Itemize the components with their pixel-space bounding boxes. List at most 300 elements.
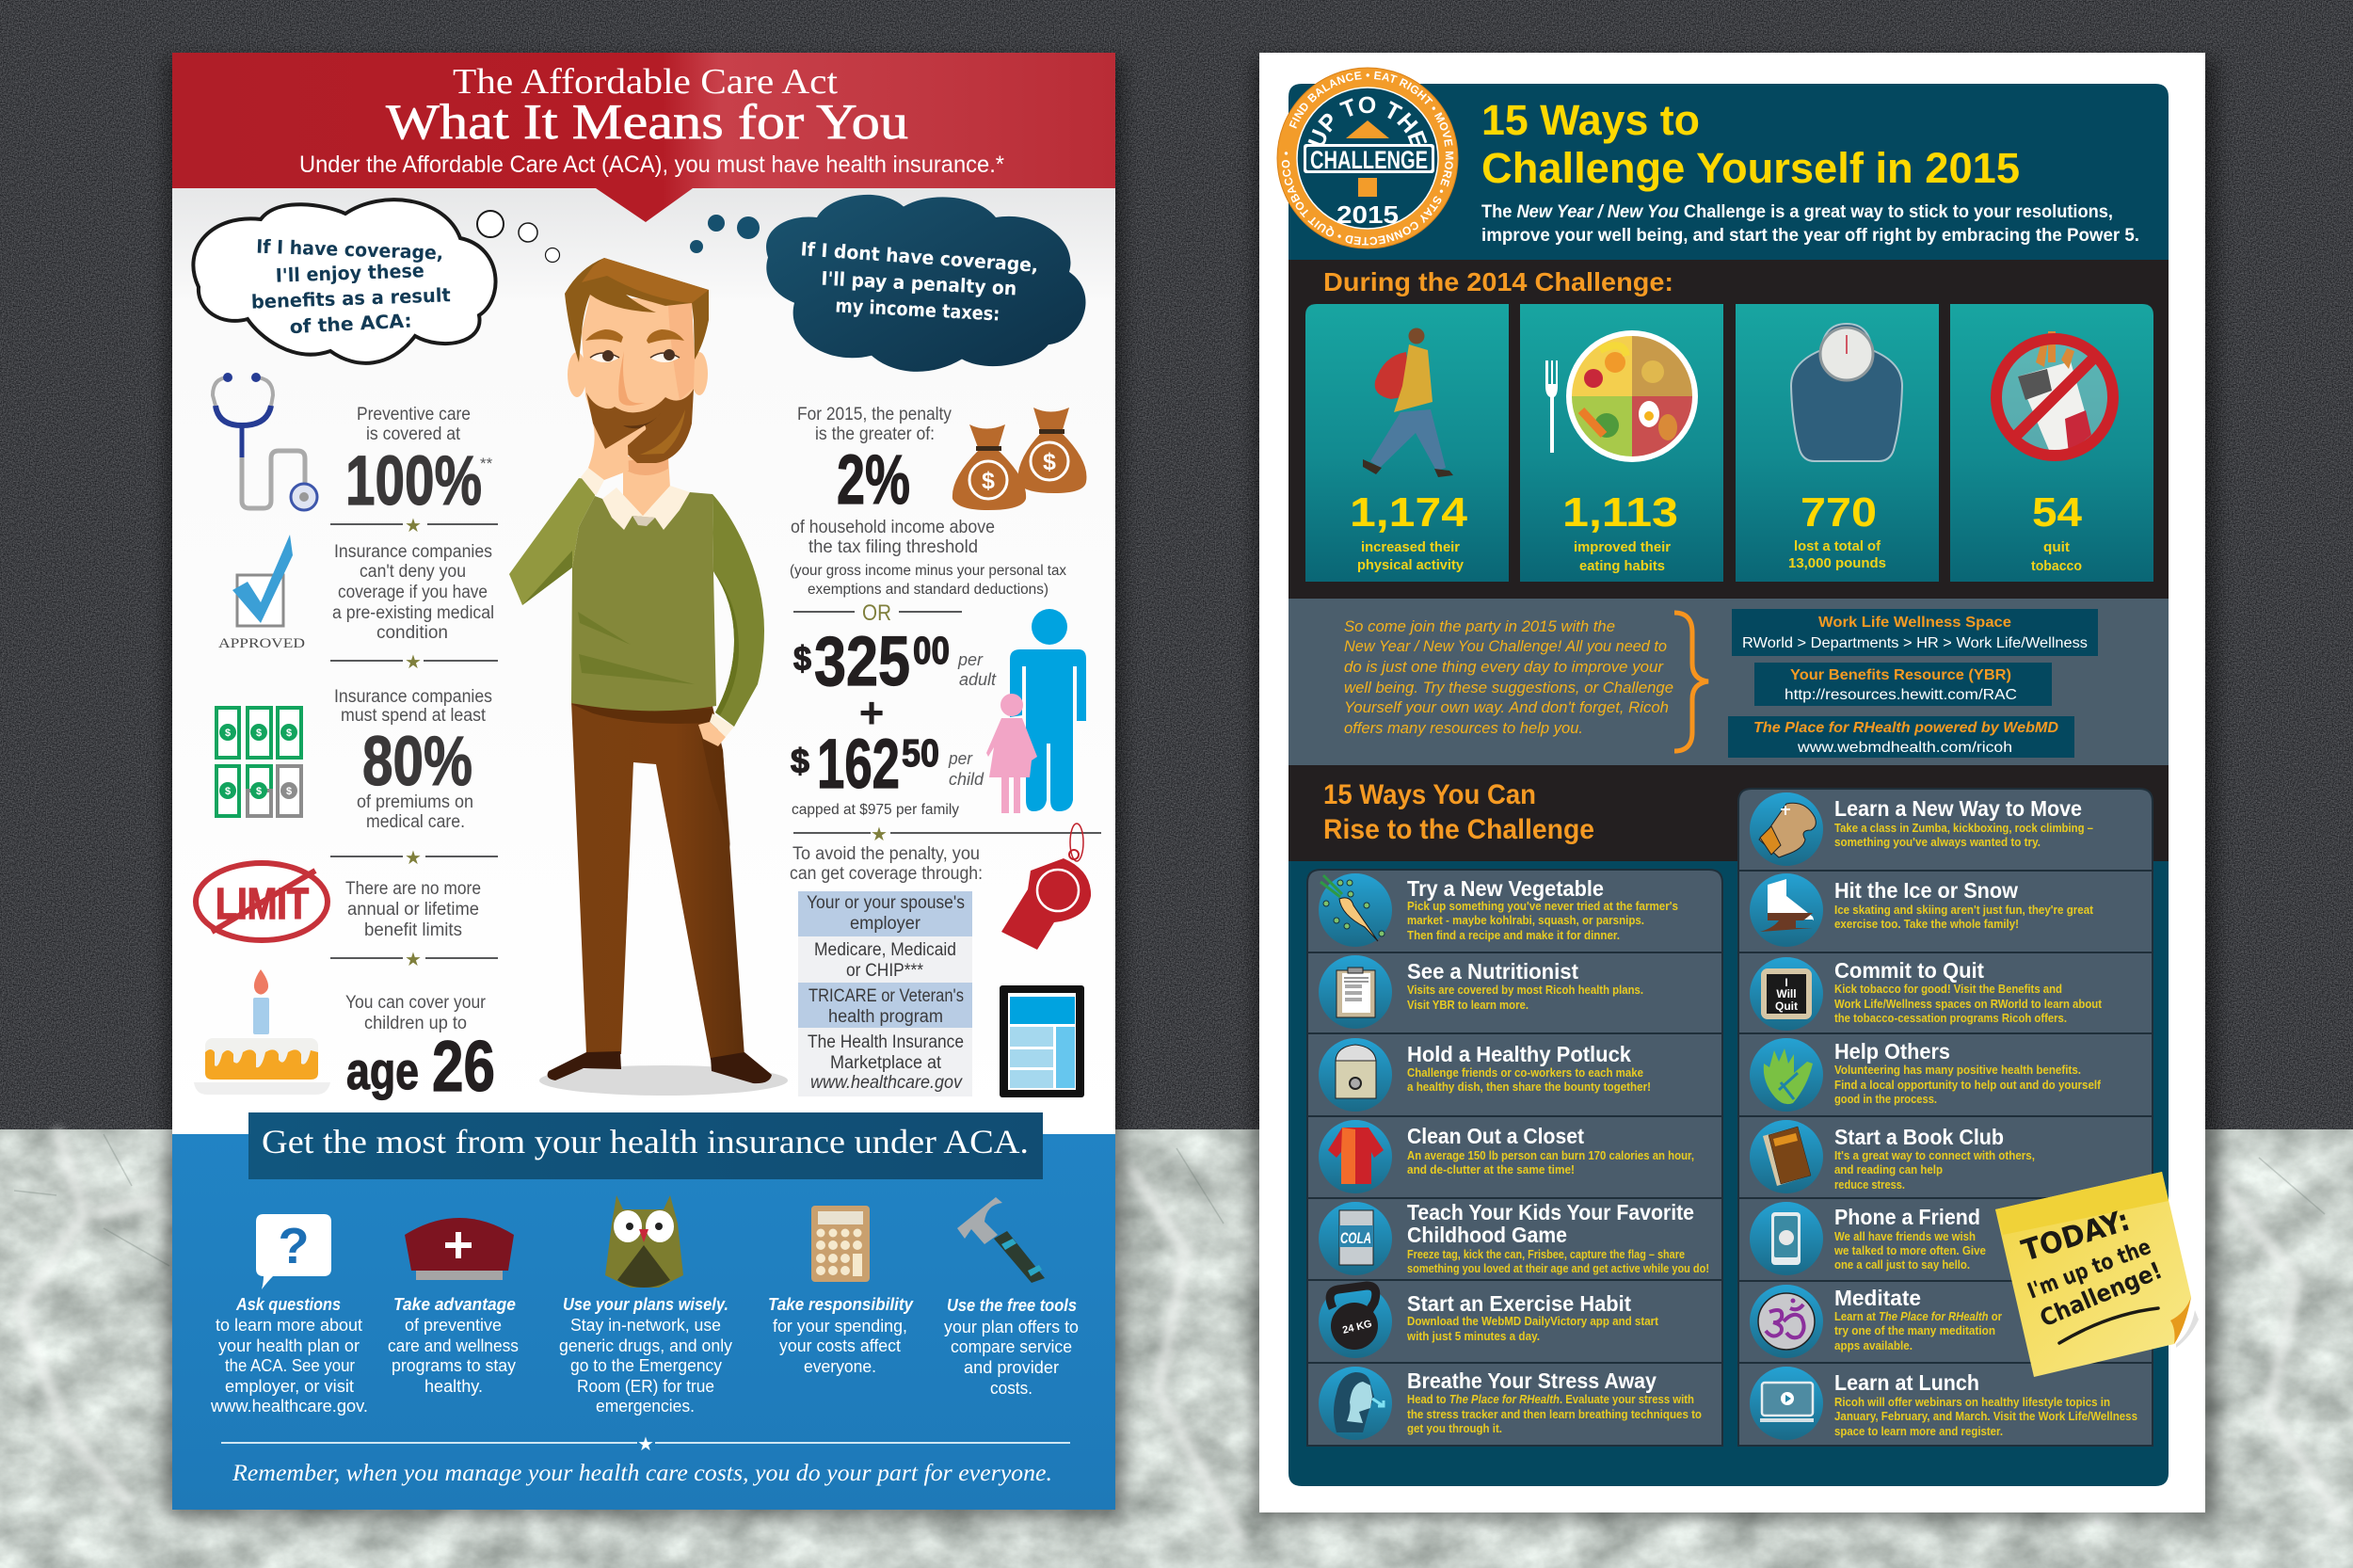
- tip: free tools: your plan offers to: [944, 1317, 1079, 1336]
- heading: 15 Ways You Can Rise to the Challenge: Rise to the Challenge: [1323, 814, 1594, 845]
- adult penalty amount: 325: [814, 622, 910, 700]
- thought bubble: without coverage: If I dont have coverage,: [800, 237, 1039, 277]
- item: Commit to Quit: Kick tobacco for good! Visit the Benefits and: [1834, 982, 2062, 996]
- icon: dollar bills: $: [286, 728, 292, 739]
- item: Help Others: Help Others: [1834, 1039, 1950, 1064]
- adult penalty amount: adult: [959, 670, 997, 689]
- pre-existing condition text: coverage if you have: [338, 583, 488, 602]
- coverage options table: The Health Insurance: [808, 1032, 964, 1052]
- adult penalty amount: [793, 622, 997, 700]
- item: Help Others: [1750, 1038, 2102, 1112]
- item: Phone a Friend: we talked to more often. Give: [1833, 1243, 1986, 1257]
- item: Learn at Lunch: Ricoh will offer webinars on healthy lifestyle topics in: [1834, 1395, 2110, 1409]
- coverage options table: [798, 891, 972, 1096]
- title: Challenge Yourself in 2015: [1481, 144, 2020, 192]
- item: Hold a Healthy Potluck: Hold a Healthy Potluck: [1407, 1042, 1631, 1066]
- no limits text: There are no more: [345, 879, 481, 899]
- item: Start a Book Club: [1750, 1120, 2035, 1193]
- adult penalty amount: per: [957, 650, 984, 669]
- dark band behind stats: [1289, 260, 2169, 599]
- resource box: Work Life Wellness Space: Work Life Wellness Space: [1818, 615, 2011, 631]
- penalty 2 percent stat: of household income above: [791, 518, 995, 537]
- item: Start a Book Club: It's a great way to connect with others,: [1834, 1148, 2035, 1162]
- badge: Up to the Challenge 2015: FIND BALANCE • EAT RIGHT • MOVE MORE • STAY CONNECTED • QUIT TOBACCO •: [1282, 72, 1453, 245]
- tip: ask questions: Ask questions: [235, 1294, 341, 1314]
- avoid penalty intro: can get coverage through:: [790, 864, 983, 884]
- title block: What It Means for You: [386, 95, 908, 150]
- age 26 stat: children up to: [364, 1014, 467, 1033]
- premiums stat: must spend at least: [341, 706, 487, 726]
- tip: ask questions: your health plan or: [218, 1336, 360, 1355]
- age 26 stat: 26: [432, 1027, 495, 1107]
- badge: Up to the Challenge 2015: 2015: [1337, 200, 1399, 229]
- heading: Get the most from your health insurance under ACA.: [262, 1123, 1029, 1160]
- coverage options table: or CHIP***: [846, 961, 924, 981]
- resource box: Work Life Wellness Space: [1732, 609, 2098, 656]
- icon: stethoscope: [213, 373, 317, 510]
- item: Start a Book Club: reduce stress.: [1834, 1177, 1905, 1192]
- adult penalty amount: $: [793, 639, 811, 678]
- pre-existing condition text: a pre-existing medical: [332, 603, 494, 623]
- tip: free tools: and provider: [964, 1357, 1059, 1377]
- heading: 15 Ways You Can Rise to the Challenge: 15 Ways You Can: [1323, 779, 1536, 810]
- title block: [386, 62, 908, 150]
- item: Help Others: Find a local opportunity to help out and do yourself: [1834, 1078, 2102, 1092]
- sticky note: I'm up to the: [2025, 1235, 2154, 1304]
- item: Hold a Healthy Potluck: [1319, 1038, 1651, 1112]
- premiums stat: of premiums on: [357, 792, 473, 812]
- no limits text: annual or lifetime: [347, 900, 479, 920]
- eyebrows: [585, 329, 623, 343]
- stat tile: eating habits: improved their: [1574, 539, 1671, 555]
- intro paragraph: improve your well being, and start the year off right by embracing the Power 5.: [1481, 226, 2139, 246]
- resource box: The Place for RHealth: www.webmdhealth.com/ricoh: [1797, 740, 2012, 756]
- stat tile: eating habits: 1,113: [1562, 489, 1678, 536]
- coverage options table: Marketplace at: [830, 1053, 942, 1073]
- invitation paragraph: So come join the party in 2015 with the: [1344, 617, 1615, 635]
- resource box: Your Benefits Resource: http://resources.hewitt.com/RAC: [1785, 687, 2017, 703]
- resource box: Your Benefits Resource: Your Benefits Resource (YBR): [1790, 667, 2011, 683]
- tip: ask questions: [210, 1294, 368, 1416]
- item: See a Nutritionist: Visits are covered by most Ricoh health plans.: [1407, 983, 1643, 997]
- icon: money bags: [952, 408, 1086, 510]
- icon: question bubble: ?: [279, 1218, 309, 1274]
- icon: dollar bills: $: [225, 786, 231, 797]
- item: Teach Your Kids Your Favorite Childhood Game: COLA: [1340, 1229, 1371, 1247]
- item: Clean Out a Closet: Clean Out a Closet: [1407, 1124, 1584, 1148]
- item: Commit to Quit: Commit to Quit: [1834, 958, 1984, 983]
- item: Meditate: try one of the many meditation: [1834, 1323, 1995, 1337]
- coverage options table: TRICARE or Veteran's: [808, 986, 964, 1006]
- child penalty amount: 162: [817, 725, 900, 803]
- icon: dollar bills: [216, 708, 301, 816]
- premiums stat: medical care.: [366, 812, 465, 832]
- item: Start a Book Club: and reading can help: [1834, 1162, 1943, 1176]
- badge: Up to the Challenge 2015: UP TO THE: [1308, 96, 1427, 144]
- tip: use plans wisely: Room (ER) for true: [577, 1376, 714, 1396]
- coverage options table: employer: [850, 914, 921, 934]
- item: Help Others: good in the process.: [1834, 1092, 1937, 1106]
- item: Try a New Vegetable: Then find a recipe and make it for dinner.: [1407, 928, 1620, 942]
- floor shadow: [539, 1065, 788, 1096]
- invitation paragraph: [1344, 617, 1673, 737]
- stat tile: pounds lost: 13,000 pounds: [1788, 555, 1886, 571]
- item: Try a New Vegetable: market - maybe kohlrabi, squash, or parsnips.: [1407, 913, 1644, 927]
- icon: limit crossed out: [196, 863, 328, 940]
- coverage options table: Medicare, Medicaid: [814, 940, 956, 960]
- tip: take responsibility: everyone.: [804, 1356, 876, 1376]
- nose: [618, 351, 645, 406]
- tip: ask questions: to learn more about: [216, 1315, 362, 1335]
- sweater torso: [571, 492, 716, 711]
- pre-existing condition text: Insurance companies: [334, 542, 492, 562]
- item: Start an Exercise Habit: 24 KG: [1341, 1319, 1373, 1336]
- item: See a Nutritionist: See a Nutritionist: [1407, 959, 1578, 984]
- avoid penalty intro: [790, 844, 983, 884]
- item: Breathe Your Stress Away: Head to The Place for RHealth. Evaluate your stress with: [1407, 1392, 1694, 1406]
- item: Start an Exercise Habit: Download the WebMD DailyVictory app and start: [1407, 1314, 1659, 1328]
- title: [1481, 96, 2020, 192]
- icon: approved check: [218, 535, 305, 651]
- header banner with pointer: [172, 53, 1115, 222]
- item: Hold a Healthy Potluck: Challenge friends or co-workers to each make: [1407, 1065, 1643, 1080]
- child penalty amount: 50: [902, 731, 939, 775]
- tip: take responsibility: Take responsibility: [768, 1294, 915, 1314]
- child penalty amount: capped at $975 per family: [792, 802, 959, 818]
- item: Phone a Friend: We all have friends we wish: [1834, 1229, 1976, 1243]
- orange brace: [1674, 613, 1708, 751]
- divider: ★: [405, 652, 422, 673]
- stat tile: pounds lost: lost a total of: [1794, 538, 1881, 554]
- icon: plate and fork: [1545, 330, 1698, 462]
- item: Try a New Vegetable: Pick up something you've never tried at the farmer's: [1407, 899, 1678, 913]
- item: Learn a New Way to Move: Take a class in Zumba, kickboxing, rock climbing –: [1834, 821, 2093, 835]
- list card: left column: [1307, 870, 1722, 1446]
- trousers: [571, 701, 744, 1060]
- resource box: Your Benefits Resource: [1754, 663, 2052, 706]
- item: Meditate: Learn at The Place for RHealth or: [1834, 1309, 2002, 1323]
- tip: use plans wisely: Stay in-network, use: [570, 1315, 721, 1335]
- tip: take advantage: healthy.: [424, 1376, 483, 1396]
- invitation paragraph: offers many resources to help you.: [1344, 719, 1583, 737]
- item: Learn a New Way to Move: Learn a New Way to Move: [1834, 796, 2082, 821]
- coverage options table: health program: [828, 1007, 943, 1027]
- thought bubble: with coverage: of the ACA:: [289, 309, 412, 338]
- item: Breathe Your Stress Away: the stress tracker and then learn breathing techniques to: [1407, 1407, 1702, 1421]
- icon: walking person: [1363, 328, 1453, 477]
- tip: free tools: Use the free tools: [947, 1295, 1077, 1315]
- stat tile: quit tobacco: [1950, 304, 2153, 582]
- heading: During the 2014 Challenge: During the 2014 Challenge:: [1323, 267, 1673, 296]
- heading: 15 Ways You Can Rise to the Challenge: [1323, 779, 1594, 845]
- child penalty amount: child: [949, 770, 984, 789]
- eyes: [590, 353, 619, 362]
- item: Hit the Ice or Snow: Ice skating and skiing aren't just fun, they're great: [1834, 903, 2094, 917]
- tip: ask questions: www.healthcare.gov.: [210, 1396, 368, 1416]
- age 26 stat: age: [346, 1041, 419, 1100]
- benefits column: [194, 373, 498, 1107]
- icon: money bags: $: [1043, 449, 1056, 475]
- item: Learn a New Way to Move: something you've always wanted to try.: [1834, 835, 2041, 849]
- item: Breathe Your Stress Away: [1319, 1367, 1702, 1440]
- item: Commit to Quit: [1750, 957, 2103, 1031]
- divider: ★: [405, 950, 422, 970]
- face: [582, 295, 695, 452]
- child penalty amount: per: [948, 749, 973, 768]
- icon: hammer: [957, 1197, 1045, 1283]
- intro paragraph: The New Year / New You Challenge is a great way to stick to your resolutions,: [1481, 202, 2113, 222]
- resource box: The Place for RHealth: The Place for RHealth powered by WebMD: [1753, 720, 2058, 736]
- preventive care stat: [345, 405, 493, 520]
- thought bubble: without coverage: [690, 195, 1085, 372]
- item: Hold a Healthy Potluck: a healthy dish, then share the bounty together!: [1407, 1080, 1651, 1094]
- coverage options table: www.healthcare.gov: [810, 1073, 963, 1093]
- subtitle: Under the Affordable Care Act (ACA), you must have health insurance.*: [299, 152, 1004, 178]
- penalty 2 percent stat: 2%: [837, 440, 910, 519]
- age 26 stat: You can cover your: [345, 993, 487, 1013]
- item: Commit to Quit: the tobacco-cessation programs Ricoh offers.: [1834, 1011, 2067, 1025]
- item: See a Nutritionist: Visit YBR to learn more.: [1407, 998, 1529, 1012]
- no limits text: benefit limits: [364, 920, 462, 940]
- section: blue tips band: [172, 1112, 1115, 1510]
- item: Breathe Your Stress Away: get you through it.: [1407, 1421, 1502, 1435]
- tip: take advantage: [388, 1294, 519, 1396]
- tip: free tools: [944, 1295, 1079, 1398]
- premiums stat: 80%: [362, 722, 472, 800]
- sticky note: [1995, 1172, 2199, 1377]
- stat tile: quit tobacco: 54: [2032, 489, 2083, 536]
- ears: [568, 352, 586, 397]
- item: See a Nutritionist: [1319, 955, 1643, 1029]
- pre-existing condition text: can't deny you: [360, 562, 466, 582]
- item: Hit the Ice or Snow: exercise too. Take the whole family!: [1834, 917, 2019, 931]
- premiums stat: Insurance companies: [334, 687, 492, 707]
- thought bubble: with coverage: [193, 200, 559, 363]
- left arm raised to chin: [509, 478, 596, 605]
- item: Meditate: Meditate: [1834, 1286, 1921, 1310]
- stat tile: pounds lost: 770: [1801, 489, 1877, 536]
- penalty 2 percent stat: exemptions and standard deductions): [808, 582, 1048, 598]
- preventive care stat: Preventive care: [357, 405, 471, 424]
- tip: take advantage: programs to stay: [392, 1355, 517, 1375]
- icon: calculator: [811, 1206, 870, 1282]
- resource box: Work Life Wellness Space: RWorld > Departments > HR > Work Life/Wellness: [1742, 635, 2088, 651]
- invitation paragraph: do is just one thing every day to improve your: [1344, 658, 1664, 676]
- item: Try a New Vegetable: [1319, 873, 1678, 947]
- stat tile: quit tobacco: quit: [2043, 539, 2070, 555]
- icon: tablet: [1000, 985, 1084, 1097]
- icon: bathroom scale: [1791, 324, 1902, 461]
- stat tile: pounds lost: [1736, 304, 1939, 582]
- teal-navy poster panel: [1289, 84, 2169, 1486]
- stat tile: physical activity: physical activity: [1357, 557, 1465, 573]
- pre-existing condition text: [332, 542, 494, 643]
- item: Learn at Lunch: space to learn more and register.: [1834, 1424, 2003, 1438]
- OR divider: OR: [862, 600, 891, 626]
- icon: question bubble: [256, 1214, 331, 1289]
- icon: nurse cap: [405, 1218, 514, 1280]
- item: Learn at Lunch: Learn at Lunch: [1834, 1370, 1979, 1395]
- background: dark granite wall: [0, 0, 2353, 1129]
- hair: [565, 258, 709, 362]
- item: Teach Your Kids Your Favorite Childhood Game: Freeze tag, kick the can, Frisbee, capture the flag – share: [1407, 1247, 1685, 1261]
- icon: no smoking sign: [1996, 331, 2113, 461]
- invitation paragraph: New Year / New You Challenge! All you need to: [1344, 637, 1667, 655]
- icon: dollar bills: $: [225, 728, 231, 739]
- preventive care stat: **: [480, 455, 493, 472]
- preventive care stat: 100%: [345, 441, 482, 520]
- item: Meditate: [1750, 1285, 2002, 1358]
- item: Phone a Friend: Phone a Friend: [1834, 1205, 1980, 1229]
- tip: take responsibility: your costs affect: [779, 1336, 901, 1355]
- tip: ask questions: the ACA. See your: [225, 1355, 355, 1375]
- panel: left poster - Affordable Care Act: [172, 53, 1115, 1510]
- premiums stat: [334, 687, 492, 832]
- tip: ask questions: employer, or visit: [225, 1376, 354, 1396]
- pre-existing condition text: condition: [376, 623, 448, 643]
- stat tile: quit tobacco: tobacco: [2031, 558, 2082, 574]
- dark band behind section heading: [1289, 765, 2169, 861]
- divider: ★: [871, 824, 888, 845]
- beard: [586, 389, 694, 463]
- illustration: thinking bearded man: [509, 258, 788, 1096]
- no limits text: [345, 879, 481, 940]
- icon: dollar bills: $: [256, 728, 262, 739]
- item: Clean Out a Closet: [1319, 1120, 1694, 1193]
- sticky note: TODAY:: [2018, 1204, 2134, 1269]
- tip: take advantage: Take advantage: [393, 1294, 516, 1314]
- icon: owl: [605, 1195, 683, 1288]
- adult penalty amount: 00: [913, 629, 950, 672]
- item: Hit the Ice or Snow: [1750, 873, 2094, 947]
- item: Commit to Quit: Work Life/Wellness spaces on RWorld to learn about: [1834, 997, 2103, 1011]
- coverage options table: Your or your spouse's: [807, 893, 965, 913]
- item: Start a Book Club: Start a Book Club: [1834, 1125, 2004, 1149]
- icon: money bags: $: [982, 468, 995, 494]
- item: Learn at Lunch: [1750, 1367, 2137, 1440]
- item: Teach Your Kids Your Favorite Childhood Game: something you loved at their age and get active while you do!: [1407, 1261, 1709, 1275]
- title: 15 Ways to: [1481, 96, 1700, 144]
- list card: right column: [1738, 789, 2153, 1446]
- tip: take advantage: care and wellness: [388, 1336, 519, 1355]
- closing line: Remember, when you manage your health care costs, you do your part for everyone.: [232, 1461, 1052, 1486]
- stat tile: physical activity: increased their: [1361, 539, 1460, 555]
- heading bar: [248, 1112, 1043, 1179]
- thought bubble: without coverage: my income taxes:: [835, 294, 1000, 325]
- item: Learn a New Way to Move: [1750, 792, 2093, 866]
- item: Try a New Vegetable: Try a New Vegetable: [1407, 876, 1604, 901]
- grey band behind resources: [1289, 599, 2169, 765]
- icon: dollar bills: $: [256, 786, 262, 797]
- item: Help Others: Volunteering has many positive health benefits.: [1834, 1063, 2081, 1077]
- item: Commit to Quit: Quit: [1775, 1000, 1798, 1013]
- hand on chin: [588, 424, 646, 480]
- intro paragraph: [1481, 202, 2139, 246]
- stat tile: eating habits: eating habits: [1579, 558, 1665, 574]
- tip: free tools: costs.: [990, 1378, 1032, 1398]
- shirt collar: [602, 486, 690, 530]
- thought bubble: with coverage: I'll enjoy these: [275, 259, 424, 287]
- neck: [623, 456, 670, 518]
- stat tile: eating habits: [1520, 304, 1723, 582]
- preventive care stat: is covered at: [366, 424, 461, 444]
- divider: ★: [405, 516, 422, 536]
- item: Start an Exercise Habit: [1319, 1285, 1659, 1358]
- thought bubble: with coverage: benefits as a result: [250, 283, 452, 313]
- age 26 stat: [345, 993, 495, 1107]
- penalty 2 percent stat: the tax filing threshold: [808, 537, 978, 557]
- item: Phone a Friend: [1750, 1202, 1986, 1275]
- item: Teach Your Kids Your Favorite Childhood Game: [1319, 1200, 1709, 1275]
- thought bubble: with coverage: If I have coverage,: [256, 235, 444, 264]
- tip: take responsibility: [768, 1294, 915, 1376]
- tip: use plans wisely: [559, 1294, 733, 1416]
- child penalty amount: [791, 725, 984, 818]
- tip: use plans wisely: go to the Emergency: [570, 1355, 723, 1375]
- icon: adult and child figures: [986, 609, 1086, 813]
- avoid penalty intro: To avoid the penalty, you: [792, 844, 980, 864]
- icon: dollar bills: $: [286, 786, 292, 797]
- penalty 2 percent stat: For 2015, the penalty: [797, 405, 952, 424]
- icon: approved check: APPROVED: [218, 636, 305, 651]
- icon: limit crossed out: LIMIT: [216, 879, 309, 928]
- background: marble surface: [0, 1129, 2353, 1568]
- item: Start an Exercise Habit: Start an Exercise Habit: [1407, 1291, 1631, 1316]
- thought bubble: without coverage: I'll pay a penalty on: [821, 267, 1017, 299]
- divider: ★: [405, 848, 422, 869]
- tip: free tools: compare service: [951, 1336, 1072, 1356]
- item: Breathe Your Stress Away: Breathe Your Stress Away: [1407, 1368, 1657, 1393]
- stat tile: physical activity: 1,174: [1350, 489, 1468, 536]
- penalties column: [790, 405, 1101, 1097]
- icon: whistle: [1001, 824, 1091, 950]
- item: Phone a Friend: one a call just to say hello.: [1834, 1257, 1970, 1272]
- stat tile: physical activity: [1305, 304, 1509, 582]
- plus sign: +: [859, 688, 884, 737]
- item: Meditate: apps available.: [1834, 1338, 1913, 1352]
- item: Start an Exercise Habit: with just 5 minutes a day.: [1406, 1329, 1540, 1343]
- item: Teach Your Kids Your Favorite Childhood Game: Teach Your Kids Your Favorite: [1407, 1200, 1694, 1224]
- badge: Up to the Challenge 2015: CHALLENGE: [1310, 146, 1428, 174]
- penalty 2 percent stat: (your gross income minus your personal tax: [790, 563, 1066, 579]
- tip: use plans wisely: emergencies.: [596, 1396, 695, 1416]
- item: Learn at Lunch: January, February, and March. Visit the Work Life/Wellness: [1834, 1409, 2137, 1423]
- invitation paragraph: Yourself your own way. And don't forget, Ricoh: [1344, 698, 1669, 716]
- title block: The Affordable Care Act: [453, 62, 838, 102]
- tip: use plans wisely: generic drugs, and only: [559, 1336, 733, 1355]
- sticky note: Challenge!: [2036, 1256, 2166, 1333]
- poster body: [172, 188, 1115, 1135]
- penalty 2 percent stat: [790, 405, 1066, 598]
- tip: use plans wisely: Use your plans wisely.: [563, 1294, 728, 1314]
- item: Teach Your Kids Your Favorite Childhood Game: Childhood Game: [1407, 1223, 1567, 1247]
- item: Commit to Quit: Will: [1776, 987, 1797, 1000]
- icon: birthday cake: [194, 969, 330, 1095]
- invitation paragraph: well being. Try these suggestions, or Challenge: [1344, 679, 1673, 696]
- item: Hit the Ice or Snow: Hit the Ice or Snow: [1834, 878, 2018, 903]
- item: Clean Out a Closet: An average 150 lb person can burn 170 calories an hour,: [1407, 1148, 1694, 1162]
- penalty 2 percent stat: is the greater of:: [815, 424, 935, 444]
- panel: right poster - 15 Ways to Challenge Yourself: [1259, 53, 2205, 1512]
- resource box: The Place for RHealth: [1728, 716, 2074, 758]
- item: Clean Out a Closet: and de-clutter at the same time!: [1407, 1162, 1575, 1176]
- right sleeve, hand in pocket: [698, 722, 726, 746]
- item: Commit to Quit: I: [1785, 976, 1788, 989]
- divider: ★: [637, 1434, 654, 1455]
- tip: take advantage: of preventive: [405, 1315, 502, 1335]
- tip: take responsibility: for your spending,: [773, 1316, 907, 1336]
- child penalty amount: $: [791, 742, 809, 780]
